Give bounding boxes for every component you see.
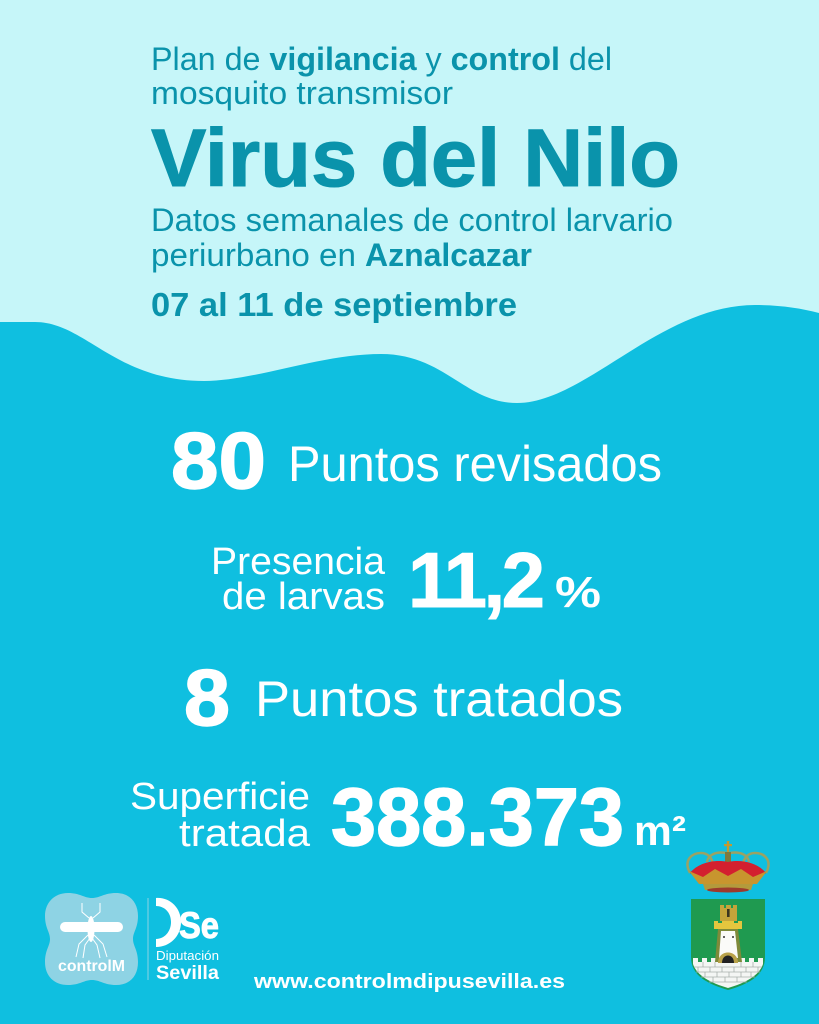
unit m2: m²: [634, 807, 686, 854]
wordmark Sevilla: Sevilla: [156, 963, 219, 984]
crown: [688, 841, 768, 892]
website url: www.controlmdipusevilla.es: [253, 971, 565, 993]
label line 1: Superficie: [130, 776, 310, 818]
divider: [148, 898, 149, 980]
stat: presencia de larvas: [211, 536, 601, 624]
wordmark Diputación: Diputación: [156, 948, 219, 963]
background: wave panel: [0, 305, 819, 1024]
header text block: [151, 41, 680, 323]
wordmark Se: Se: [179, 905, 219, 946]
stat: puntos revisados: [171, 416, 662, 505]
description line 1: Datos semanales de control larvario: [151, 202, 673, 238]
logo: Diputación de Sevilla: [156, 898, 219, 984]
tower: [714, 905, 742, 963]
shield: [691, 899, 765, 990]
label: Puntos tratados: [255, 671, 623, 727]
stat: superficie tratada: [130, 772, 686, 863]
logo wordmark: controlM: [58, 958, 125, 975]
label line 2: tratada: [179, 813, 311, 855]
icon: coat of arms: [688, 841, 768, 990]
description line 2: [151, 237, 532, 273]
icon: arc mark: [156, 898, 181, 947]
description line 2: periurbano en: [151, 237, 356, 273]
shield wall: [693, 958, 763, 988]
number 11,2: 11,2: [408, 536, 545, 624]
label: Puntos revisados: [288, 436, 662, 492]
logo: controlM: [45, 893, 138, 985]
label line 1: Presencia: [211, 541, 386, 583]
label line 2: de larvas: [222, 576, 385, 618]
title: Virus del Nilo: [151, 113, 680, 204]
number 8: 8: [184, 653, 230, 742]
subtitle line 1: Plan de vigilancia y control del: [151, 41, 612, 77]
description line 2: Aznalcazar: [365, 237, 532, 273]
icon: mosquito: [60, 903, 123, 958]
date: 07 al 11 de septiembre: [151, 286, 517, 323]
percent sign: %: [555, 568, 601, 617]
subtitle line 2: mosquito transmisor: [151, 75, 453, 111]
logo badge: [45, 893, 138, 985]
stat: puntos tratados: [184, 653, 623, 742]
number 388.373: 388.373: [331, 772, 624, 863]
number 80: 80: [171, 416, 266, 505]
